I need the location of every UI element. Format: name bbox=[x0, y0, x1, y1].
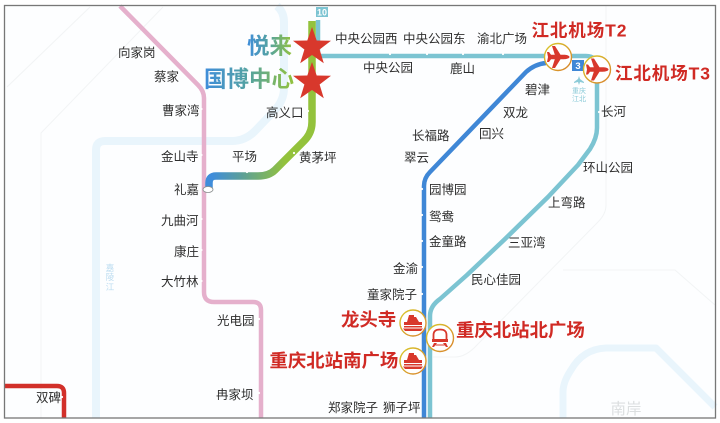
icon: train 重庆北站南广场 bbox=[400, 348, 426, 374]
station labels: pink line: 蔡家 bbox=[154, 69, 180, 84]
airport note: 重庆江北: 重庆 bbox=[572, 86, 586, 95]
callout: 重庆北站南广场: 重庆北站南广场 bbox=[270, 350, 398, 371]
river label: 嘉陵江 bbox=[106, 263, 115, 292]
callout: 江北机场T2: 江北机场T2 bbox=[532, 20, 627, 40]
station labels: blue line: 碧津 bbox=[525, 83, 550, 97]
heading: 国博中心: 国博中心 bbox=[204, 67, 295, 92]
station labels: blue line: 园博园 bbox=[429, 182, 467, 197]
station labels: blue line: 翠云 bbox=[404, 151, 429, 165]
station labels: teal line: 长河 bbox=[601, 105, 627, 119]
station labels: pink line: 礼嘉 bbox=[174, 182, 199, 197]
river: Jialing bbox=[96, 6, 284, 418]
icon: star 国博中心 bbox=[293, 62, 331, 98]
river label: 嘉陵江: 江 bbox=[106, 282, 115, 292]
airport note: 重庆江北 bbox=[572, 76, 586, 103]
station labels: blue line: 长福路 bbox=[412, 128, 450, 143]
icon: airport T2 bbox=[544, 44, 572, 70]
icon: star 悦来 bbox=[293, 27, 331, 63]
station labels: pink line: 曹家湾 bbox=[162, 103, 200, 118]
heading: 悦来: 悦来 bbox=[247, 34, 292, 59]
station labels: teal line: 环山公园 bbox=[583, 161, 633, 175]
metro line: blue bbox=[424, 63, 546, 418]
river label: 嘉陵江: 嘉 bbox=[106, 263, 114, 273]
station labels: teal line: 中央公园 bbox=[363, 60, 413, 75]
station labels: pink line: 大竹林 bbox=[161, 275, 199, 289]
station labels: blue line: 郑家院子 bbox=[328, 400, 378, 415]
station labels: blue line: 金童路 bbox=[429, 234, 467, 249]
station labels: blue line: 金渝 bbox=[393, 261, 419, 276]
station labels: pink line: 金山寺 bbox=[161, 149, 199, 164]
station dots bbox=[61, 53, 600, 398]
river: Yangtze bbox=[563, 348, 715, 418]
callout: 江北机场T3: 江北机场T3 bbox=[615, 64, 711, 84]
terminus marker: 礼嘉 bbox=[203, 186, 213, 192]
line badge: 3: 3 bbox=[575, 61, 581, 72]
line badge: 10: 10 bbox=[317, 8, 327, 18]
icon: train 龙头寺 bbox=[400, 310, 426, 336]
station labels: pink line: 康庄 bbox=[174, 244, 199, 259]
callout: 龙头寺: 龙头寺 bbox=[341, 309, 396, 330]
line badge: 3 bbox=[572, 60, 584, 72]
station labels: line 10 bbox=[232, 105, 337, 165]
callout: 重庆北站北广场: 重庆北站北广场 bbox=[456, 320, 585, 340]
icon: airport T3 bbox=[584, 56, 610, 83]
metro line: pink bbox=[120, 6, 261, 418]
station labels: teal line bbox=[335, 31, 633, 287]
station labels: blue line bbox=[328, 83, 550, 415]
station labels: pink line bbox=[118, 45, 255, 402]
station labels: blue line: 双龙 bbox=[503, 106, 528, 120]
station labels: line 10: 黄茅坪 bbox=[299, 151, 337, 165]
icon: high-speed train 重庆北站北广场 bbox=[426, 324, 454, 352]
metro line: red bbox=[5, 386, 64, 418]
station labels: teal line: 上弯路 bbox=[548, 195, 586, 210]
station labels: blue line: 鸳鸯 bbox=[429, 209, 455, 224]
station labels: blue line: 童家院子 bbox=[367, 287, 417, 302]
station labels: line 10: 平场 bbox=[232, 150, 257, 164]
station labels: blue line: 狮子坪 bbox=[383, 401, 421, 415]
station labels: pink line: 冉家坝 bbox=[216, 387, 254, 402]
metro line: teal bbox=[318, 20, 597, 418]
station labels: pink line: 九曲河 bbox=[161, 214, 199, 228]
station labels: teal line: 鹿山 bbox=[450, 61, 475, 76]
station labels: teal line: 三亚湾 bbox=[508, 235, 546, 250]
river label: 嘉陵江: 陵 bbox=[106, 272, 115, 282]
station labels: pink line: 向家岗 bbox=[118, 45, 156, 60]
station labels: teal line: 中央公园东 bbox=[403, 31, 466, 46]
station labels: line 10: 高义口 bbox=[266, 105, 304, 120]
station labels: blue line: 回兴 bbox=[479, 127, 504, 141]
station labels: teal line: 中央公园西 bbox=[335, 31, 398, 46]
station label: 双碑: 双碑 bbox=[36, 390, 61, 405]
station labels: teal line: 民心佳园 bbox=[471, 273, 521, 287]
airport note: 重庆江北: 江北 bbox=[572, 95, 586, 103]
metro line: 10 gradient bbox=[209, 21, 312, 190]
station labels: pink line: 光电园 bbox=[217, 314, 255, 328]
station labels: teal line: 渝北广场 bbox=[477, 31, 527, 46]
district label: 南岸: 南岸 bbox=[610, 400, 642, 418]
